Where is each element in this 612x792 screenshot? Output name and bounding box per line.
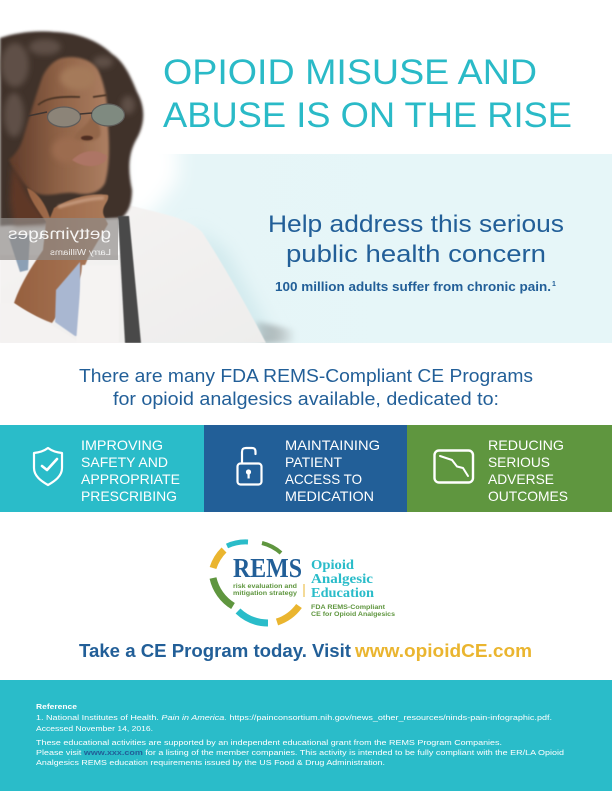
panel: improving safety: PRESCRIBING: [81, 488, 177, 504]
hair highlights: [1, 39, 135, 137]
title: ABUSE IS ON THE RISE: [163, 95, 572, 135]
statistic: 100 million adults suffer from chronic pain.: [275, 279, 551, 294]
panel: footer: [0, 680, 612, 791]
call to action: www.opioidCE.com: [354, 640, 532, 661]
panel: maintaining access: MAINTAINING: [285, 437, 380, 453]
eyebrows: [38, 95, 107, 105]
panel: hero band: [130, 154, 612, 343]
logo: REMS: FDA REMS-Compliant: [311, 604, 386, 611]
call to action: [79, 640, 532, 661]
center shirt: [55, 262, 81, 336]
fingers and hand: [14, 188, 108, 323]
panel: improving safety: APPROPRIATE: [81, 471, 180, 487]
watermark: gettyimages: [0, 218, 118, 260]
subtitle: Help address this serious: [268, 211, 564, 238]
face: [9, 57, 109, 195]
panel: improving safety: [0, 425, 204, 512]
panel: reducing outcomes: ADVERSE: [488, 471, 554, 487]
panel: maintaining access: [204, 425, 407, 512]
left shirt: [8, 235, 30, 272]
subtitle: public health concern: [286, 241, 546, 268]
logo: REMS: CE for Opioid Analgesics: [311, 611, 395, 618]
watermark: gettyimages: gettyimages: [8, 226, 111, 243]
footer references: These educational activities are supported by an independent educational grant from the REMS Program Companies.: [36, 738, 502, 747]
panel: improving safety: IMPROVING: [81, 437, 163, 453]
footer references: Please visit www.xxx.com for a listing of the member companies. This activity is intended to be fully compliant with the ER/LA Opioid: [36, 748, 564, 757]
logo: REMS: mitigation strategy: [233, 590, 297, 597]
call to action: Take a CE Program today. Visit: [79, 640, 351, 661]
finger highlight: [58, 198, 104, 207]
icon: shield with check: [34, 448, 62, 485]
white coat: [0, 204, 266, 343]
logo: REMS: [213, 542, 395, 623]
cheek highlight: [52, 140, 66, 160]
logo: REMS: REMS: [233, 553, 302, 583]
logo: REMS: risk evaluation and: [233, 583, 297, 590]
footer references: Reference: [36, 702, 77, 711]
hair: [0, 31, 143, 226]
chair shade: [255, 322, 296, 343]
footer references: Analgesics REMS education requirements issued by the US Food & Drug Administration.: [36, 758, 385, 767]
photo: doctor looking away: [0, 31, 296, 343]
footer references: Accessed November 14, 2016.: [36, 724, 153, 733]
nose: [78, 118, 101, 141]
footer references: 1. National Institutes of Health. Pain in America. https://painconsortium.nih.gov/news_other_resources/ninds-pain-infographic.pdf.: [36, 713, 552, 722]
panel: reducing outcomes: OUTCOMES: [488, 488, 568, 504]
panel: reducing outcomes: [407, 425, 612, 512]
title: OPIOID MISUSE AND: [163, 52, 537, 92]
panel: maintaining access: ACCESS TO: [285, 471, 362, 487]
panel: reducing outcomes: SERIOUS: [488, 454, 550, 470]
icon: open padlock: [238, 448, 262, 484]
neck: [10, 165, 50, 226]
coat lapel: [76, 264, 86, 337]
panel: reducing outcomes: REDUCING: [488, 437, 564, 453]
white halo around hair: [130, 154, 182, 211]
panel: maintaining access: PATIENT: [285, 454, 342, 470]
subtitle: [268, 211, 564, 294]
left coat sleeve: [14, 303, 41, 319]
icon: declining chart: [434, 450, 473, 482]
coat shadow: [206, 236, 277, 343]
logo: REMS: Education: [311, 585, 375, 600]
intro text: [79, 365, 533, 409]
logo ring: [213, 542, 299, 623]
logo: REMS: Opioid: [311, 557, 355, 572]
intro text: There are many FDA REMS-Compliant CE Programs: [79, 365, 533, 386]
glasses: [28, 104, 124, 127]
panel: improving safety: SAFETY AND: [81, 454, 168, 470]
footer references: [36, 702, 564, 767]
forehead highlight: [59, 66, 88, 90]
title: [163, 52, 572, 135]
logo: REMS: Analgesic: [311, 571, 373, 586]
intro text: for opioid analgesics available, dedicated to:: [113, 388, 499, 409]
watermark: gettyimages: Larry Williams: [50, 248, 111, 257]
lips: [72, 151, 107, 166]
panel: maintaining access: MEDICATION: [285, 488, 374, 504]
subtitle: 1: [552, 281, 556, 288]
stethoscope strap: [118, 216, 141, 343]
